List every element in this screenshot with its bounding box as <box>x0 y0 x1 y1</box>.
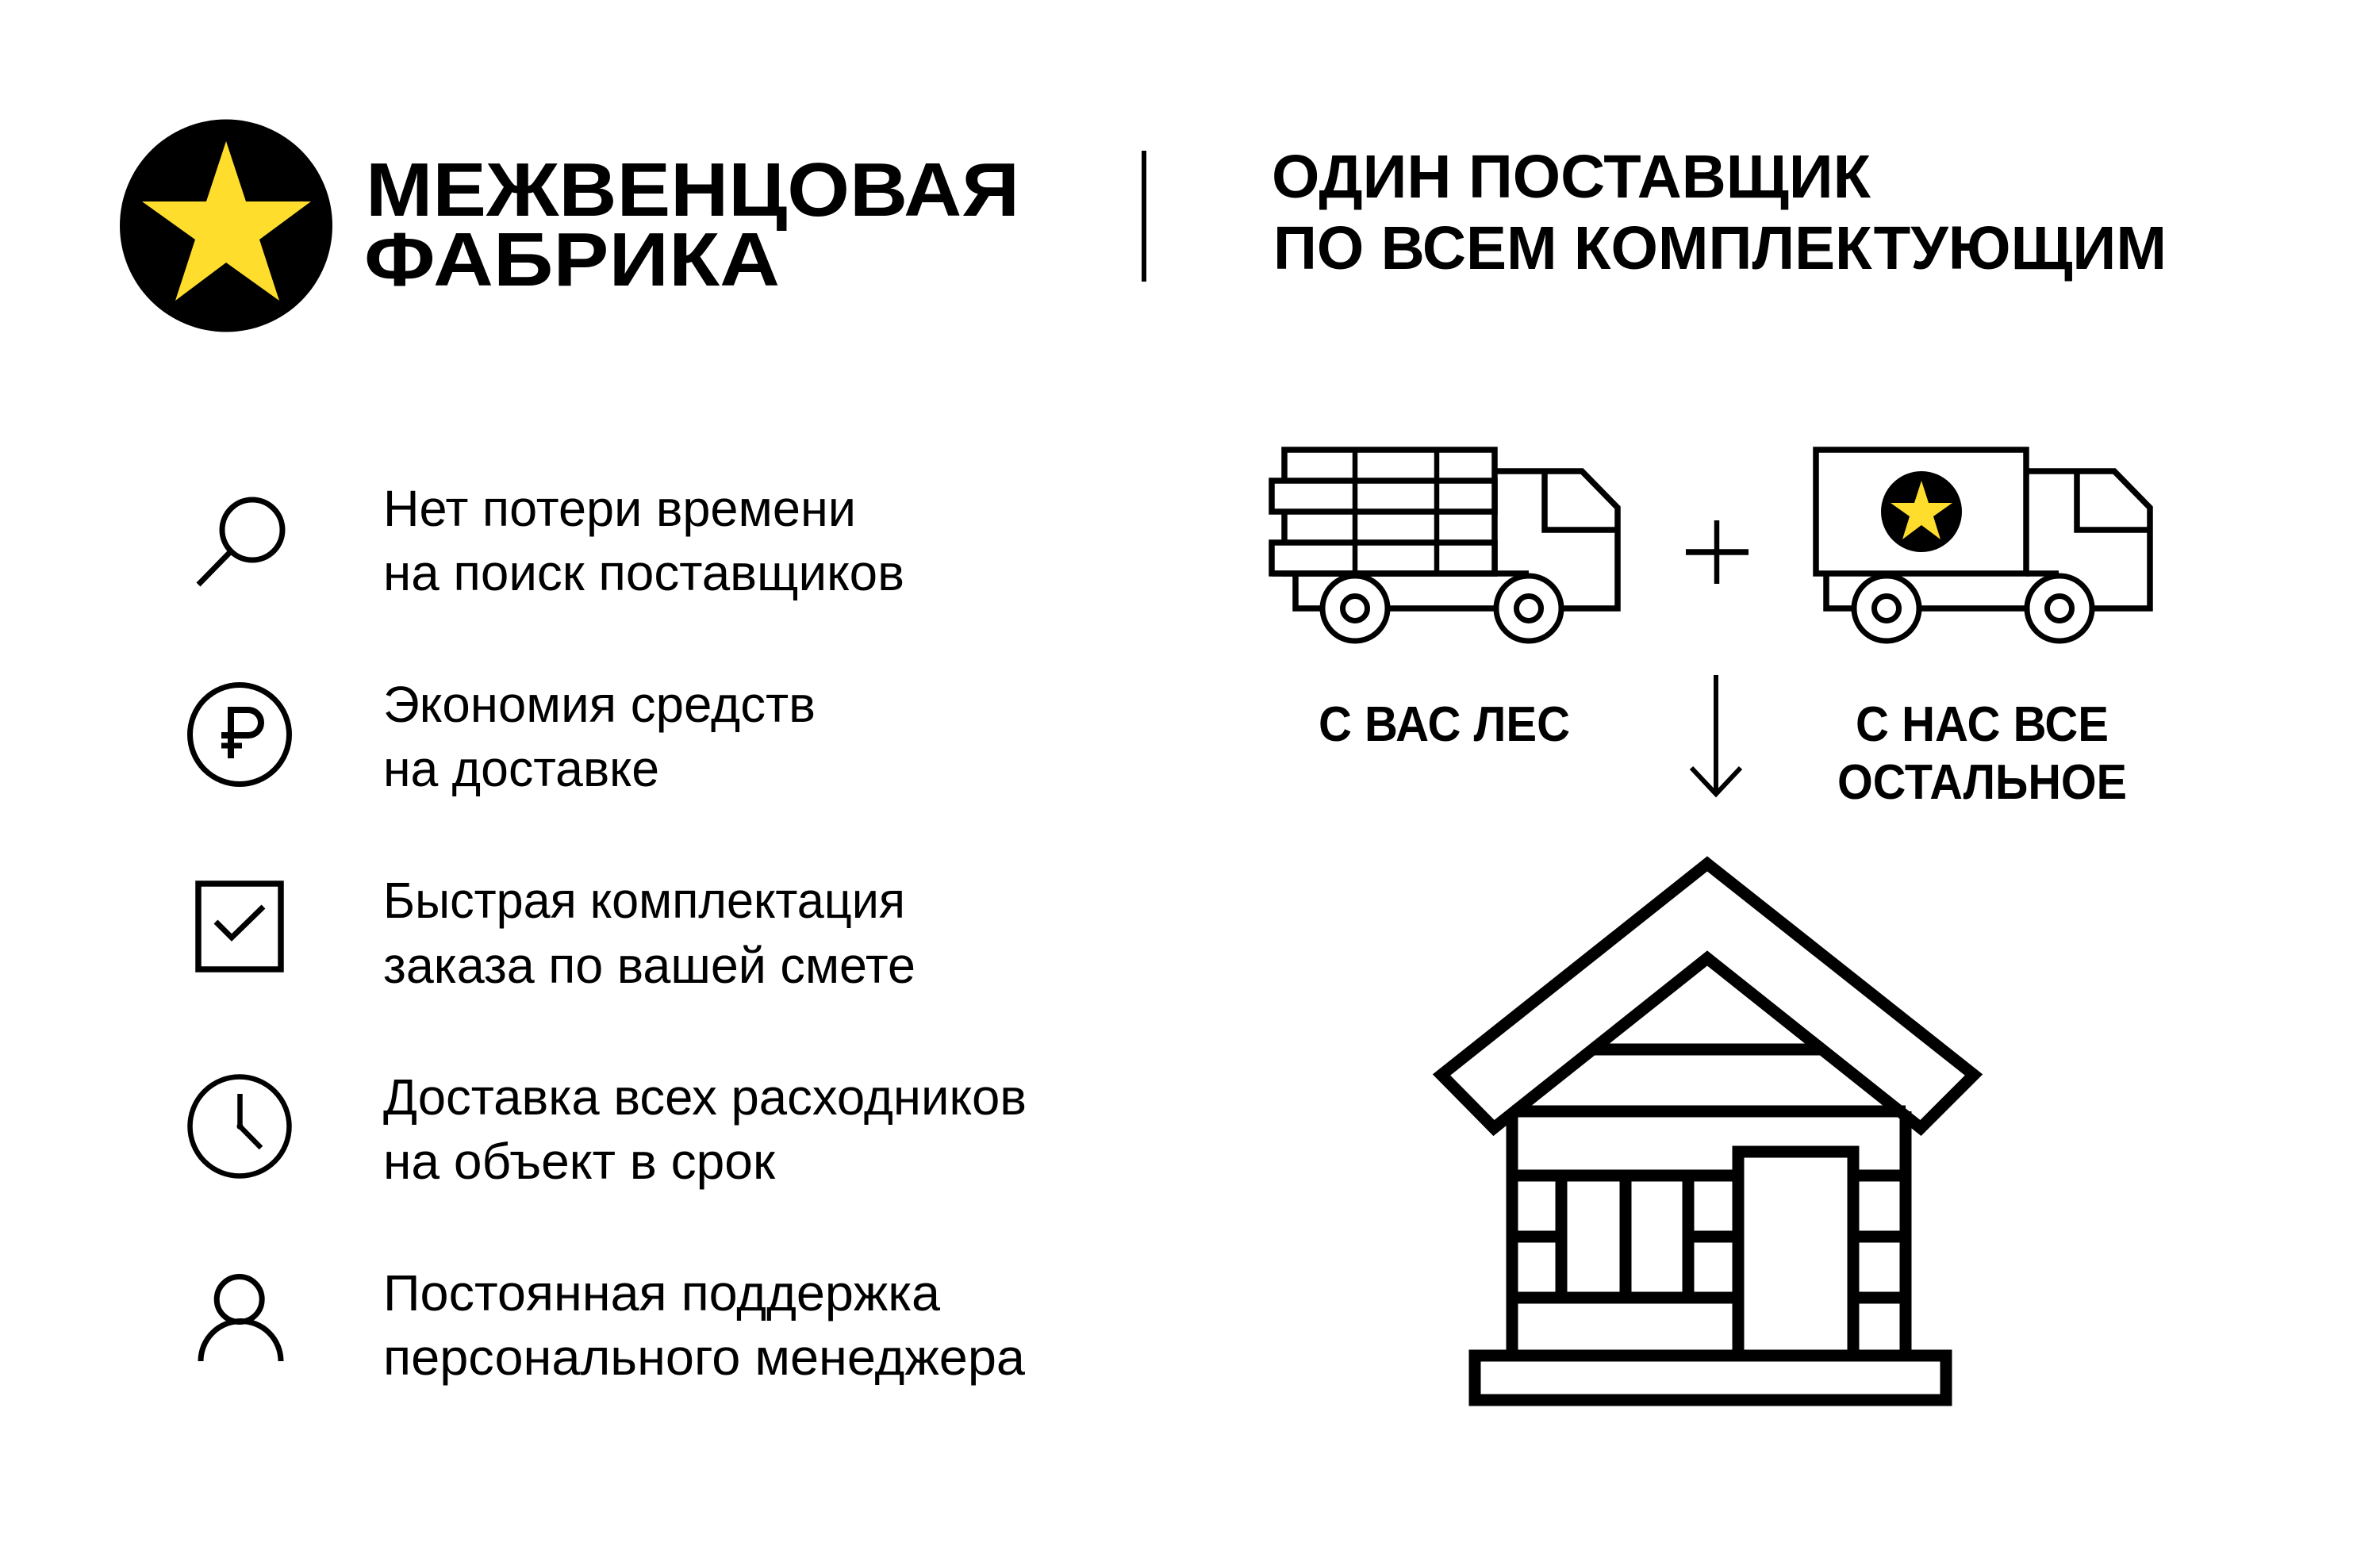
benefit 1 icon: magnifier <box>198 500 282 585</box>
heading: one supplier: ОДИН ПОСТАВЩИК <box>1272 143 1871 211</box>
benefit 5 text: Постоянная поддержка <box>383 1264 940 1322</box>
roof <box>1441 864 1974 1128</box>
benefit 5 text <box>383 1264 1025 1386</box>
brand name: МЕЖВЕНЦОВАЯ <box>366 148 1019 232</box>
small logo on truck <box>1881 471 1962 552</box>
house <box>1441 864 1974 1400</box>
label: everything else from us: ОСТАЛЬНОЕ <box>1837 755 2127 810</box>
door <box>1738 1152 1853 1356</box>
brand name <box>364 148 1019 302</box>
benefit 3 icon: checkbox <box>198 884 281 969</box>
truck with company logo <box>1816 450 2150 641</box>
heading: one supplier <box>1272 143 2167 282</box>
logo: black circle with yellow star <box>120 119 332 332</box>
walls <box>1512 1111 1906 1358</box>
label: timber from you: С ВАС ЛЕС <box>1319 697 1570 752</box>
gable <box>1512 1049 1906 1111</box>
benefit 3 text <box>383 872 916 994</box>
header divider <box>1142 151 1146 282</box>
benefit 3 text: заказа по вашей смете <box>383 937 916 994</box>
timber load <box>1272 450 1495 574</box>
benefit 1 text: Нет потери времени <box>383 480 856 537</box>
benefit 5 icon: person <box>201 1277 281 1361</box>
heading: one supplier: ПО ВСЕМ КОМПЛЕКТУЮЩИМ <box>1273 214 2167 282</box>
benefit 4 text: на объект в срок <box>383 1133 776 1190</box>
logs and window <box>1512 1176 1906 1298</box>
plus sign <box>1686 520 1749 584</box>
truck cab and chassis <box>1272 471 1618 608</box>
benefit 3 text: Быстрая комплектация <box>383 872 905 929</box>
benefit 1 text <box>383 480 904 601</box>
truck wheels <box>1322 576 1561 641</box>
benefit 2 text: на доставке <box>383 740 659 797</box>
foundation <box>1475 1356 1946 1400</box>
cargo box <box>1816 450 2026 574</box>
label: everything else from us <box>1837 697 2127 810</box>
truck wheels <box>1854 576 2092 641</box>
benefit 2 text: Экономия средств <box>383 676 816 733</box>
benefit 4 text: Доставка всех расходников <box>383 1068 1027 1126</box>
truck with timber <box>1272 450 1618 641</box>
benefit 1 text: на поиск поставщиков <box>383 544 904 601</box>
benefit 4 icon: clock <box>190 1077 289 1176</box>
benefit 4 text <box>383 1068 1027 1190</box>
label: everything else from us: С НАС ВСЕ <box>1856 697 2109 752</box>
arrow down <box>1691 675 1741 794</box>
benefit 2 text <box>383 676 816 797</box>
truck cab and chassis <box>1826 471 2150 608</box>
brand name: ФАБРИКА <box>364 217 780 302</box>
benefit 5 text: персонального менеджера <box>383 1329 1025 1386</box>
benefit 2 icon: ruble coin <box>190 685 289 784</box>
